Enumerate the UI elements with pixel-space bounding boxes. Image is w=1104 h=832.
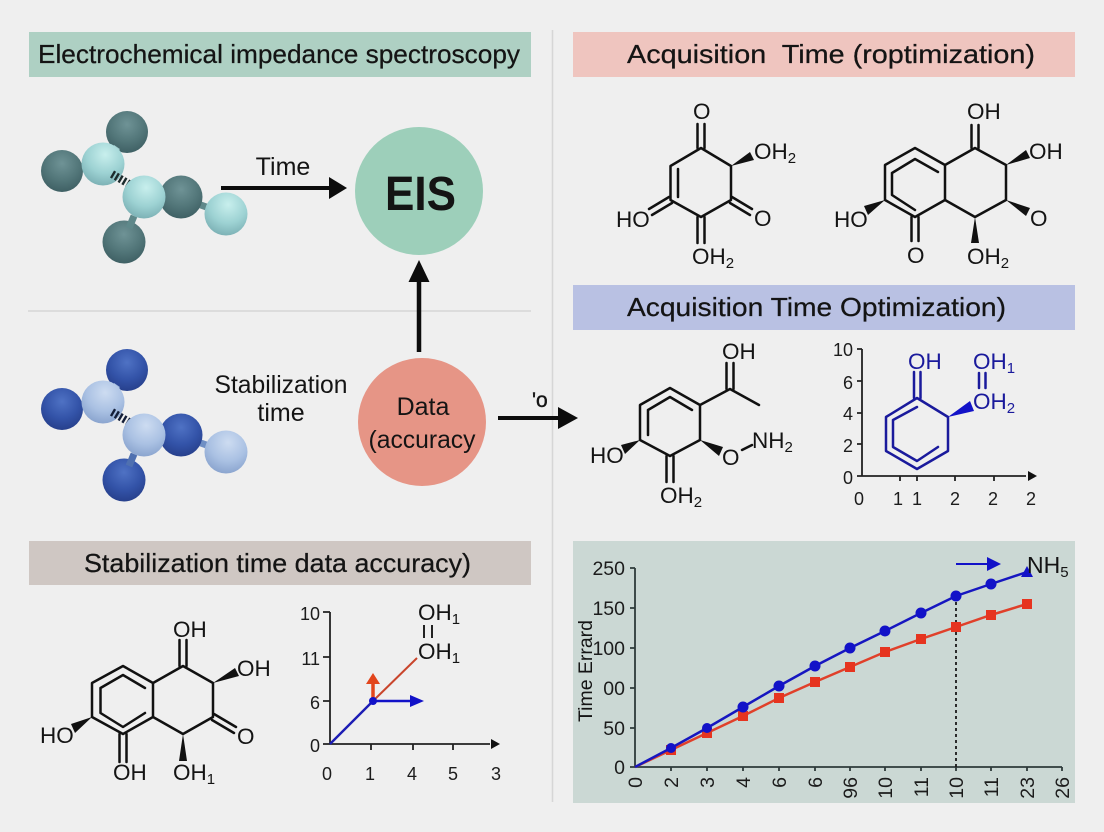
chart: axes with blue ring structure [833, 340, 1037, 509]
axes and ticks: 6 [769, 777, 791, 788]
chart axes and ticks: 0 [322, 764, 332, 784]
axes and ticks: 50 [603, 718, 625, 740]
structure: quinone ring top left [616, 99, 796, 272]
structure: naphthoquinone top right: O [1030, 206, 1048, 231]
chart axes and ticks: 0 [310, 736, 320, 756]
chart axes and ticks: 4 [407, 764, 417, 784]
chart axes and ticks: 0 [854, 489, 864, 509]
heading: electrochemical impedance spectroscopy: Electrochemical impedance spectroscopy [38, 39, 520, 69]
chart axes and ticks: 6 [310, 693, 320, 713]
structure: naphthoquinone bottom left [40, 617, 271, 788]
structure: naphthoquinone bottom left: 1 [207, 771, 215, 788]
axes and ticks: 26 [1052, 777, 1074, 799]
structure: amino-oxy ring middle: NH [752, 428, 784, 453]
structure: quinone ring top left: OH [692, 244, 726, 269]
chart axes and ticks: 5 [448, 764, 458, 784]
chart: vector plot bottom left [300, 600, 501, 784]
blue ring structure: OH [973, 389, 1007, 414]
chart axes and ticks: 0 [843, 468, 853, 488]
node: EIS circle [355, 127, 483, 255]
structure: naphthoquinone top right: HO [834, 207, 868, 232]
arrow: data to optimization: 'o [532, 389, 548, 412]
heading: acquisition time optimization: Acquisition Time Optimization) [627, 292, 1006, 322]
axes and ticks: 0 [614, 757, 625, 779]
blue series [635, 566, 1033, 767]
legend arrow and NH5 label: NH [1027, 552, 1060, 578]
axes and ticks: 96 [840, 777, 862, 799]
structure labels: 1 [452, 650, 460, 667]
heading: acquisition time (roptimization) [573, 32, 1075, 77]
structure: naphthoquinone bottom left: OH [173, 760, 207, 785]
panel: time error line chart [573, 541, 1075, 803]
axes and ticks: 100 [592, 638, 625, 660]
legend arrow and NH5 label: 5 [1060, 564, 1069, 581]
chart axes and ticks: 4 [843, 404, 853, 424]
icon: blue ball-and-stick molecule [41, 349, 248, 502]
axes and ticks: 4 [733, 777, 755, 788]
chart axes and ticks [300, 604, 501, 784]
structure: naphthoquinone top right: OH [1029, 139, 1063, 164]
structure: quinone ring top left: 2 [788, 150, 796, 167]
chart axes and ticks: 2 [950, 489, 960, 509]
node: data accuracy circle: (accuracy [368, 426, 476, 454]
chart axes and ticks: 11 [301, 649, 320, 669]
structure: naphthoquinone bottom left: OH [173, 617, 207, 642]
chart axes and ticks: 1 [893, 489, 903, 509]
structure: naphthoquinone top right: O [907, 243, 925, 268]
structure labels: 1 [452, 611, 460, 628]
axes and ticks: 11 [911, 777, 933, 797]
structure: amino-oxy ring middle: O [722, 445, 740, 470]
axes and ticks: 2 [661, 777, 683, 788]
chart axes and ticks [833, 340, 1037, 509]
structure: naphthoquinone bottom left: O [237, 724, 255, 749]
axes and ticks: 3 [697, 777, 719, 788]
axes and ticks [592, 558, 1074, 799]
label: stabilization time: time [257, 399, 305, 427]
node: data accuracy circle: Data [397, 393, 449, 421]
axes and ticks: 0 [625, 777, 647, 788]
blue ring structure: 1 [1007, 360, 1015, 377]
icon: teal ball-and-stick molecule [41, 111, 248, 264]
label: stabilization time: Stabilization [214, 371, 348, 399]
chart axes and ticks: 1 [912, 489, 922, 509]
legend arrow and NH5 label [956, 552, 1069, 581]
heading: stabilization time data accuracy: Stabilization time data accuracy) [84, 548, 471, 578]
chart axes and ticks: 10 [833, 340, 853, 360]
axes and ticks: 23 [1017, 777, 1039, 799]
axes and ticks: 6 [805, 777, 827, 788]
dashed marker at 10 [955, 596, 957, 767]
structure: amino-oxy ring middle [590, 339, 793, 511]
blue ring structure: OH [973, 349, 1007, 374]
structure: amino-oxy ring middle: OH [660, 483, 694, 508]
heading: electrochemical impedance spectroscopy [29, 32, 531, 77]
structure: quinone ring top left: HO [616, 207, 650, 232]
structure: naphthoquinone top right: 2 [1001, 255, 1009, 272]
chart axes and ticks: 1 [365, 764, 375, 784]
structure labels [418, 600, 460, 667]
red trend line [373, 658, 417, 701]
structure: amino-oxy ring middle: HO [590, 443, 624, 468]
structure: quinone ring top left: O [754, 206, 772, 231]
structure: amino-oxy ring middle: 2 [694, 494, 702, 511]
structure: amino-oxy ring middle: OH [722, 339, 756, 364]
chart axes and ticks: 2 [988, 489, 998, 509]
blue trend line [330, 701, 373, 744]
structure labels: OH [418, 600, 452, 625]
blue right arrow [369, 695, 424, 707]
axes and ticks: 250 [592, 558, 625, 580]
structure: naphthoquinone top right: OH [967, 244, 1001, 269]
node: EIS circle: EIS [385, 167, 456, 221]
chart axes and ticks: 10 [300, 604, 320, 624]
heading: acquisition time (roptimization): Acquisition Time (roptimization) [627, 39, 1035, 69]
chart axes and ticks: 3 [491, 764, 501, 784]
red series [635, 599, 1032, 767]
structure: quinone ring top left: 2 [726, 255, 734, 272]
chart axes and ticks: 2 [1026, 489, 1036, 509]
blue ring structure: OH [908, 349, 942, 374]
label: time: Time [256, 153, 310, 181]
axes and ticks: 11 [981, 777, 1003, 797]
axes and ticks: 150 [592, 598, 625, 620]
axes and ticks: 10 [946, 777, 968, 799]
axes and ticks: 10 [875, 777, 897, 799]
chart axes and ticks: 2 [843, 436, 853, 456]
blue ring structure: 2 [1007, 400, 1015, 417]
structure: quinone ring top left: O [693, 99, 711, 124]
structure: naphthoquinone bottom left: HO [40, 723, 74, 748]
y-axis title: Time Errard [576, 620, 597, 722]
structure: naphthoquinone top right [834, 99, 1063, 272]
arrow: data accuracy up to EIS [408, 260, 430, 352]
blue ring structure [886, 349, 1015, 469]
structure: quinone ring top left: OH [754, 139, 788, 164]
node: data accuracy circle [358, 358, 486, 486]
structure: naphthoquinone bottom left: OH [113, 760, 147, 785]
heading: acquisition time optimization [573, 285, 1075, 330]
label: stabilization time [214, 371, 348, 427]
structure: naphthoquinone bottom left: OH [237, 656, 271, 681]
arrow: data to optimization [498, 389, 578, 429]
chart axes and ticks: 6 [843, 373, 853, 393]
structure labels: OH [418, 639, 452, 664]
structure: amino-oxy ring middle: 2 [784, 439, 793, 456]
red up arrow [366, 673, 380, 701]
structure: naphthoquinone top right: OH [967, 99, 1001, 124]
axes and ticks: 00 [603, 678, 625, 700]
heading: stabilization time data accuracy [29, 541, 531, 585]
arrow: time to EIS [221, 177, 347, 199]
